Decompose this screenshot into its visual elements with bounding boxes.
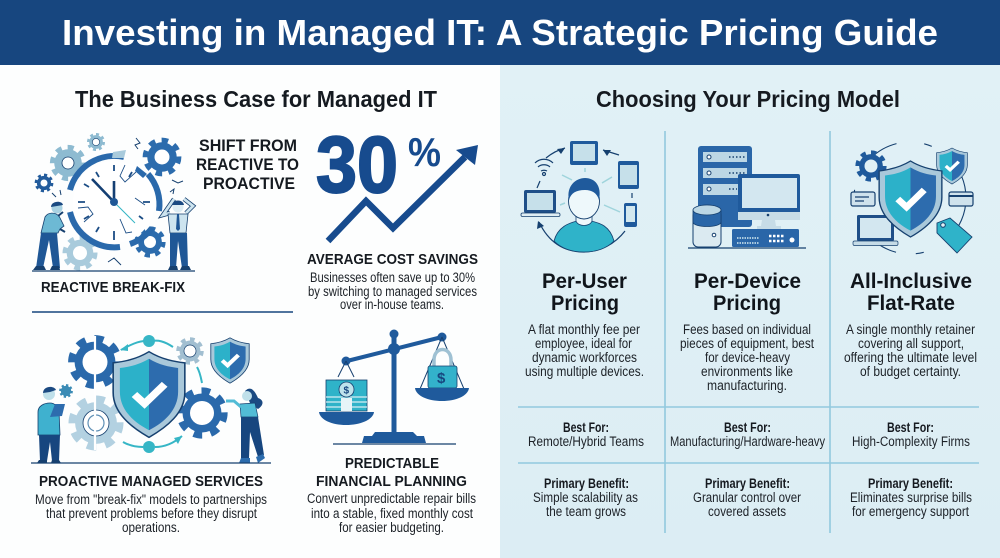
primary benefit: per-user: Primary Benefit: xyxy=(544,476,629,491)
title: per-device pricing: Per-Device xyxy=(694,270,801,293)
description: all-inclusive: offering the ultimate level xyxy=(844,350,977,365)
text: predictable financial planning: into a stable, fixed monthly cost xyxy=(311,506,473,521)
icon: padlock: $ xyxy=(437,370,446,387)
label: shift from reactive to proactive xyxy=(196,136,299,193)
title: per-user pricing xyxy=(542,270,627,315)
heading: the business case: The Business Case for Managed IT xyxy=(75,86,437,112)
description: all-inclusive: of budget certainty. xyxy=(860,364,961,379)
description: all-inclusive xyxy=(844,322,977,379)
right panel background xyxy=(500,65,1000,558)
label: shift from reactive to proactive: REACTIVE TO xyxy=(196,155,299,174)
text: proactive managed services: operations. xyxy=(122,520,180,535)
icon: money stack: $ xyxy=(344,386,350,396)
title: per-user pricing: Pricing xyxy=(551,292,619,315)
title banner xyxy=(0,0,1000,65)
title: per-user pricing: Per-User xyxy=(542,270,627,293)
text: average cost savings: over in-house teams. xyxy=(340,297,444,312)
illustration: balance scale xyxy=(319,330,469,444)
description: per-device: Fees based on individual xyxy=(683,322,811,337)
figure: stressed man right xyxy=(163,199,193,270)
best for: per-user xyxy=(528,420,644,449)
primary benefit: per-device: Granular control over xyxy=(693,490,801,505)
description: per-user: A flat monthly fee per xyxy=(528,322,640,337)
title: all-inclusive flat-rate: Flat-Rate xyxy=(867,292,955,315)
best for: per-user: Remote/Hybrid Teams xyxy=(528,434,644,449)
description: per-device: pieces of equipment, best xyxy=(680,336,814,351)
title: all-inclusive flat-rate: All-Inclusive xyxy=(850,270,972,293)
stat: 30 percent with arrow: 30 xyxy=(316,120,398,209)
text: predictable financial planning: PREDICTABLE xyxy=(345,455,439,472)
description: per-user: using multiple devices. xyxy=(525,364,644,379)
illustration: proactive managed services xyxy=(31,335,271,463)
stat: 30 percent with arrow: % xyxy=(408,129,441,175)
text: proactive managed services: that prevent problems before they disrupt xyxy=(46,506,257,521)
primary benefit: per-user: the team grows xyxy=(546,504,626,519)
heading: choosing your pricing model: Choosing Your Pricing Model xyxy=(596,86,900,112)
description: per-device: for device-heavy xyxy=(705,350,790,365)
icon: user with devices xyxy=(521,141,639,252)
label: reactive break-fix: REACTIVE BREAK-FIX xyxy=(41,280,185,296)
icon: money stack xyxy=(326,380,367,411)
description: per-user: employee, ideal for xyxy=(535,336,632,351)
text: average cost savings: by switching to managed services xyxy=(308,284,477,299)
text: predictable financial planning xyxy=(307,455,476,535)
primary benefit: per-user xyxy=(533,476,638,519)
best for: all-inclusive: High-Complexity Firms xyxy=(852,434,970,449)
figure: woman gesturing xyxy=(226,389,265,463)
title banner: Investing in Managed IT: A Strategic Pricing Guide xyxy=(62,12,938,53)
text: proactive managed services xyxy=(35,473,267,535)
figure: frustrated man left xyxy=(33,202,65,270)
best for: per-device xyxy=(670,420,825,449)
primary benefit: all-inclusive: for emergency support xyxy=(852,504,969,519)
title: per-device pricing xyxy=(694,270,801,315)
icon: server, monitor and database xyxy=(688,146,806,248)
primary benefit: all-inclusive: Eliminates surprise bills xyxy=(850,490,972,505)
description: per-device xyxy=(680,322,814,393)
description: all-inclusive: covering all support, xyxy=(858,336,964,351)
column: per-user pricing xyxy=(521,141,644,519)
arrow: rising trend xyxy=(328,145,478,241)
primary benefit: all-inclusive: Primary Benefit: xyxy=(868,476,953,491)
text: average cost savings: Businesses often save up to 30% xyxy=(310,270,475,285)
icon: wifi xyxy=(535,159,553,176)
icon: shield with tag, gear and devices xyxy=(851,142,973,254)
illustration: reactive break-fix clock xyxy=(32,134,195,271)
column: all-inclusive flat-rate xyxy=(844,142,977,519)
title: all-inclusive flat-rate xyxy=(850,270,972,315)
label: shift from reactive to proactive: PROACTIVE xyxy=(203,174,295,193)
text: proactive managed services: PROACTIVE MANAGED SERVICES xyxy=(39,473,263,490)
description: per-device: environments like xyxy=(701,364,793,379)
text: predictable financial planning: Convert unpredictable repair bills xyxy=(307,491,476,506)
primary benefit: all-inclusive xyxy=(850,476,972,519)
description: per-user xyxy=(525,322,644,379)
stat: 30 percent with arrow xyxy=(316,120,478,241)
primary benefit: per-device: Primary Benefit: xyxy=(705,476,790,491)
text: average cost savings xyxy=(307,251,478,312)
title: per-device pricing: Pricing xyxy=(713,292,781,315)
figure: man with tablet xyxy=(37,387,65,463)
label: shift from reactive to proactive: SHIFT FROM xyxy=(199,136,297,155)
best for: all-inclusive xyxy=(852,420,970,449)
description: per-user: dynamic workforces xyxy=(532,350,637,365)
primary benefit: per-device: covered assets xyxy=(708,504,786,519)
text: predictable financial planning: for easier budgeting. xyxy=(339,520,444,535)
best for: per-device: Best For: xyxy=(724,420,771,435)
text: predictable financial planning: FINANCIAL PLANNING xyxy=(316,473,467,490)
left panel background xyxy=(0,65,500,558)
primary benefit: per-user: Simple scalability as xyxy=(533,490,638,505)
column: per-device pricing xyxy=(670,146,825,519)
best for: per-device: Manufacturing/Hardware-heavy xyxy=(670,434,825,449)
text: average cost savings: AVERAGE COST SAVINGS xyxy=(307,251,478,268)
description: per-device: manufacturing. xyxy=(707,378,787,393)
primary benefit: per-device xyxy=(693,476,801,519)
best for: all-inclusive: Best For: xyxy=(887,420,934,435)
description: all-inclusive: A single monthly retainer xyxy=(846,322,975,337)
text: proactive managed services: Move from "break-fix" models to partnerships xyxy=(35,492,267,507)
best for: per-user: Best For: xyxy=(563,420,609,435)
icon: padlock xyxy=(428,350,457,388)
